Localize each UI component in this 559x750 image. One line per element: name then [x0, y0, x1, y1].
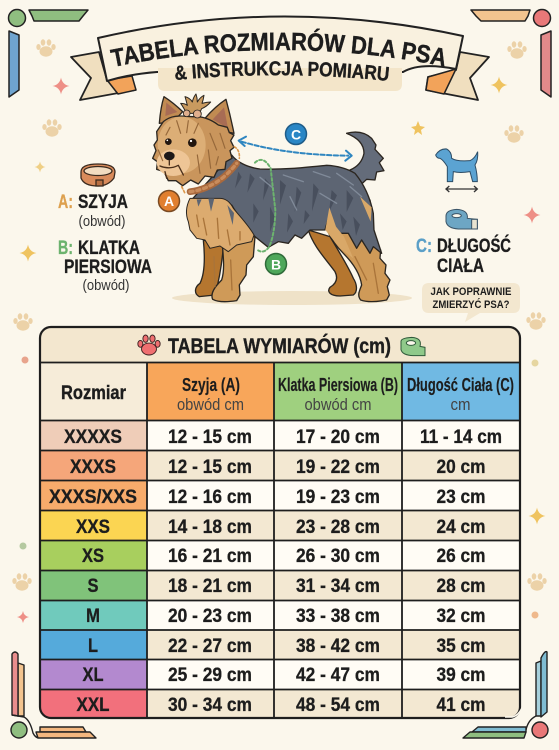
badge A	[158, 190, 180, 212]
row XXXXS	[64, 427, 502, 448]
row XXXS/XXS	[49, 487, 486, 508]
badge A: A	[164, 193, 174, 209]
row XXXS: 12 - 15 cm	[168, 457, 252, 478]
row XXXS/XXS: XXXS/XXS	[49, 487, 137, 508]
callout: how to measure: ZMIERZYĆ PSA?	[432, 298, 510, 311]
row XS: 26 cm	[436, 546, 486, 567]
row XS	[82, 546, 486, 567]
far front leg	[195, 240, 223, 297]
row XL: XL	[82, 665, 104, 686]
chest gray streaks	[197, 198, 234, 225]
measure line A	[182, 147, 239, 193]
row XS: 16 - 21 cm	[168, 546, 252, 567]
row XXS	[76, 517, 486, 538]
icon: blue dog with length arrow	[436, 149, 478, 192]
row S: 28 cm	[436, 576, 486, 597]
corner ornament: bottom left	[11, 652, 96, 738]
header: neck	[177, 375, 244, 414]
decorative paws, dots and sparkles	[12, 39, 547, 623]
corner ornament: top left	[8, 10, 88, 97]
row XXL	[76, 695, 486, 716]
row XXS: 23 - 28 cm	[296, 517, 380, 538]
label A: neck: SZYJA	[78, 192, 128, 213]
row XS: 26 - 30 cm	[296, 546, 380, 567]
row XXS: 24 cm	[436, 517, 486, 538]
table border	[40, 327, 520, 718]
hair bow	[183, 110, 201, 118]
header: size: Rozmiar	[61, 383, 127, 404]
row XXXS: 19 - 22 cm	[296, 457, 380, 478]
mouth	[160, 161, 183, 178]
row XXXXS: 12 - 15 cm	[168, 427, 252, 448]
row L: L	[88, 636, 98, 657]
icon: red paw	[138, 335, 160, 355]
coat dark fur streaks	[235, 172, 360, 236]
row XXL: XXL	[76, 695, 110, 716]
banner main band	[98, 16, 463, 81]
row XXXS/XXS: 23 cm	[436, 487, 486, 508]
body coat	[190, 155, 382, 253]
header: neck: obwód cm	[177, 395, 244, 414]
near front leg	[212, 237, 255, 302]
row XXS: XXS	[76, 517, 110, 538]
corner ornament: top right	[471, 10, 551, 97]
row XL: 39 cm	[436, 665, 486, 686]
icon: tape measure	[446, 209, 477, 229]
label A: neck	[58, 192, 128, 230]
row XXL: 48 - 54 cm	[296, 695, 380, 716]
label B: chest: B:	[58, 238, 73, 259]
measurements table	[40, 327, 522, 718]
row L	[88, 636, 486, 657]
table corner highlight	[505, 708, 522, 717]
chest shadow streaks	[197, 215, 378, 293]
icon: green tape measure	[401, 337, 425, 356]
hind tan flank	[325, 197, 372, 258]
badge C	[286, 124, 306, 144]
badge C: C	[291, 126, 301, 142]
table fills	[40, 327, 520, 718]
far hind leg	[308, 230, 356, 296]
head	[153, 116, 234, 186]
topknot	[181, 94, 211, 113]
label A: neck: (obwód)	[78, 213, 126, 230]
row XXXXS: 17 - 20 cm	[296, 427, 380, 448]
banner right fold	[426, 69, 456, 94]
row XS: XS	[82, 546, 104, 567]
ground shadow	[172, 291, 412, 305]
table grid	[40, 362, 520, 718]
left ear inner	[165, 103, 177, 116]
nose	[164, 152, 175, 160]
row XXL: 41 cm	[436, 695, 486, 716]
row L: 35 cm	[436, 636, 486, 657]
row XL: 25 - 29 cm	[168, 665, 252, 686]
row L: 22 - 27 cm	[168, 636, 252, 657]
banner left fold	[107, 76, 136, 94]
muzzle	[157, 149, 190, 176]
yorkshire terrier illustration	[153, 94, 390, 302]
header: body length: cm	[450, 395, 470, 414]
subtitle plate	[158, 68, 402, 91]
banner heading: TABELA ROZMIARÓW DLA PSA	[110, 28, 444, 66]
collar studs	[190, 163, 237, 192]
measure line C	[242, 142, 348, 156]
label B: chest: (obwód)	[82, 277, 130, 294]
banner right tail	[426, 52, 489, 100]
label C: body length: DŁUGOŚĆ	[437, 235, 511, 257]
header: neck: Szyja (A)	[182, 375, 240, 395]
row S: S	[88, 576, 98, 597]
face fur strokes	[158, 121, 225, 173]
label C: body length: CIAŁA	[437, 256, 484, 277]
right eye	[188, 138, 197, 147]
row S	[88, 576, 486, 597]
row M: 20 - 23 cm	[168, 606, 252, 627]
header: chest: Klatka Piersiowa (B)	[278, 375, 398, 395]
right ear inner	[213, 107, 228, 128]
arrowheads C	[239, 137, 352, 161]
row L: 38 - 42 cm	[296, 636, 380, 657]
icon: collar	[81, 164, 115, 186]
row XL: 42 - 47 cm	[296, 665, 380, 686]
tail	[347, 132, 384, 184]
header: body length	[407, 375, 514, 414]
row XXXXS: 11 - 14 cm	[420, 427, 502, 448]
chest fur	[187, 198, 254, 252]
row M	[86, 606, 486, 627]
header: chest: obwód cm	[304, 395, 372, 414]
row XXXS: XXXS	[70, 457, 116, 478]
row M: 32 cm	[436, 606, 486, 627]
face highlights	[158, 117, 206, 173]
banner left tail	[71, 52, 135, 100]
corner ornament: bottom right	[463, 652, 548, 738]
title banner	[70, 16, 490, 101]
eye glints	[166, 139, 192, 142]
measure line B	[255, 160, 275, 252]
label B: chest: PIERSIOWA	[64, 257, 152, 278]
label A: neck: A:	[58, 192, 73, 213]
left eye	[165, 138, 172, 145]
right ear	[205, 99, 234, 133]
row S: 18 - 21 cm	[168, 576, 252, 597]
badge B: B	[271, 256, 281, 272]
table title: TABELA WYMIARÓW (cm)	[168, 334, 391, 358]
label B: chest: KLATKA	[78, 238, 140, 259]
row XXL: 30 - 34 cm	[168, 695, 252, 716]
row XXXS: 20 cm	[436, 457, 486, 478]
row M: 33 - 38 cm	[296, 606, 380, 627]
row XXXS/XXS: 12 - 16 cm	[168, 487, 252, 508]
row XXS: 14 - 18 cm	[168, 517, 252, 538]
left ear	[159, 97, 183, 123]
row XXXXS: XXXXS	[64, 427, 122, 448]
near hind leg	[325, 200, 390, 302]
header: body length: Długość Ciała (C)	[407, 375, 514, 395]
header: chest	[278, 375, 398, 414]
row M: M	[86, 606, 100, 627]
banner subheading: & INSTRUKCJA POMIARU	[175, 61, 390, 81]
collar	[190, 163, 237, 192]
row S: 31 - 34 cm	[296, 576, 380, 597]
callout: how to measure: JAK POPRAWNIE	[430, 286, 512, 298]
label C: body length: C:	[416, 236, 432, 257]
label C: body length	[416, 235, 511, 277]
row XXXS/XXS: 19 - 23 cm	[296, 487, 380, 508]
label B: chest	[58, 238, 152, 294]
callout: how to measure	[422, 283, 520, 322]
row XL	[82, 665, 486, 686]
badge B	[266, 254, 286, 274]
coat light fur streaks	[260, 172, 362, 210]
row XXXS	[70, 457, 486, 478]
